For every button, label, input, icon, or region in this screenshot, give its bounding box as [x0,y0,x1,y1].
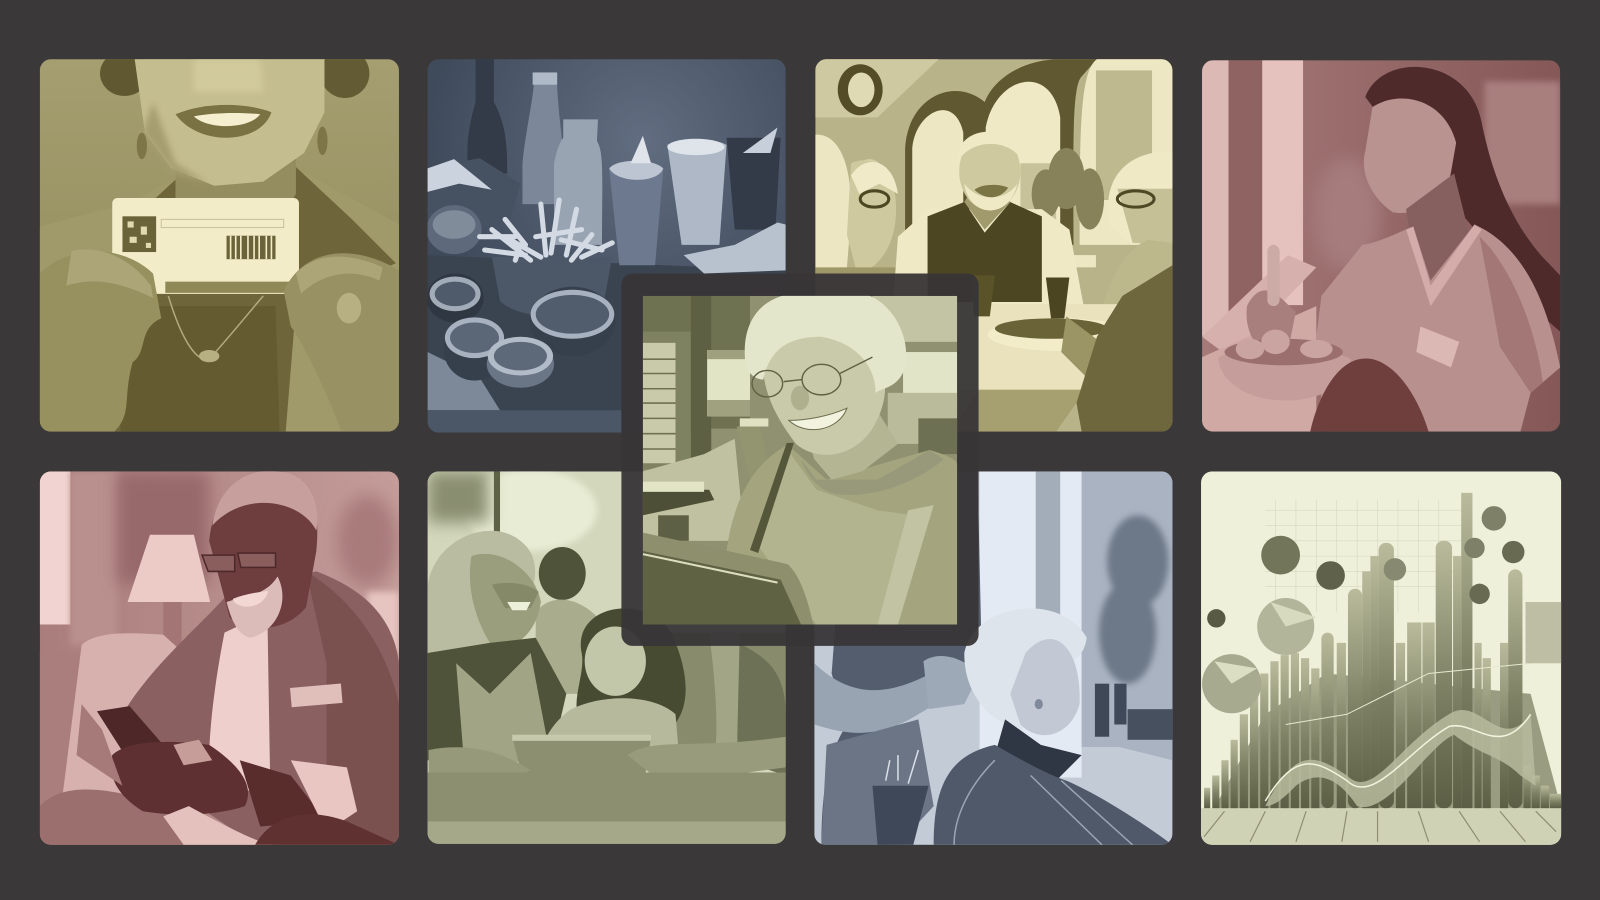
hair [1365,67,1560,332]
bowl of lemons [428,158,520,222]
face [135,59,324,186]
hands [40,251,161,432]
earrings [137,133,147,159]
hair [100,59,144,96]
grid [1265,500,1469,612]
sauce cups [427,273,484,322]
arm [1061,316,1096,376]
panel: abstract data chart [1201,471,1561,845]
right adult [653,633,786,765]
fries [492,257,612,316]
circles and pies [1261,536,1300,574]
glasses [752,357,872,397]
wall lamp [838,64,883,115]
panel: friends dining in cafe [815,59,1172,432]
plate [988,318,1106,351]
wave band [1265,710,1536,807]
background person [539,547,586,600]
panel: central featured photo frame [621,273,979,646]
arches [905,59,1097,245]
panel: food and drinks table [427,59,786,433]
floor [643,439,745,541]
panel: woman holding ID card [40,49,399,432]
girl [576,608,686,735]
holding hand [1310,359,1429,432]
dark mass under bars [1214,673,1561,808]
face and neck [1364,98,1456,213]
neck [806,403,898,480]
bottles [467,59,507,173]
jacket [122,571,399,845]
left woman [815,135,851,273]
glasses [609,168,663,265]
right side of store [872,296,957,342]
trousers [40,789,245,847]
man [893,209,1084,306]
screen [707,350,750,416]
panel: hairdresser and senior client [814,471,1172,845]
grandmother [428,531,535,673]
panel: grandmother and child with tablet [428,469,786,844]
bars [1204,493,1561,808]
text blocks [1526,602,1561,663]
scrubs [1314,224,1560,432]
table [978,304,1118,390]
hands [429,747,531,784]
stylist [821,471,982,845]
sill and ledge [1202,255,1316,357]
tablet [512,737,651,778]
mouth [176,105,271,138]
dark lapels and top [112,163,396,432]
right woman [1108,152,1172,245]
wine [973,276,995,316]
bowl and salad [1218,350,1351,401]
neck [176,159,296,198]
shelves [643,332,691,469]
tablet [643,533,813,624]
head [209,471,317,628]
shelf [1090,724,1172,760]
plant [1032,148,1104,230]
photo: woman at store kiosk [643,295,957,624]
hand and fork [1246,290,1296,340]
face [763,333,885,455]
shirt [209,612,270,796]
table [428,256,786,410]
second woman [847,160,896,273]
phone [97,706,163,767]
lamp [128,535,210,602]
counter [643,490,714,515]
blurred plant [1099,515,1168,684]
sweater [727,445,957,624]
hair [745,295,906,393]
neck and cape [995,719,1082,786]
table [428,772,786,844]
side jacket [40,224,399,432]
card [112,198,299,294]
sofa [40,653,82,806]
client hair [964,608,1087,735]
floor [1201,808,1561,845]
small bowl [427,205,482,254]
panel: nurse eating salad by window [1202,60,1560,432]
panel: man with smartphone on sofa [40,471,399,847]
hands [111,742,248,815]
face [1010,639,1080,735]
